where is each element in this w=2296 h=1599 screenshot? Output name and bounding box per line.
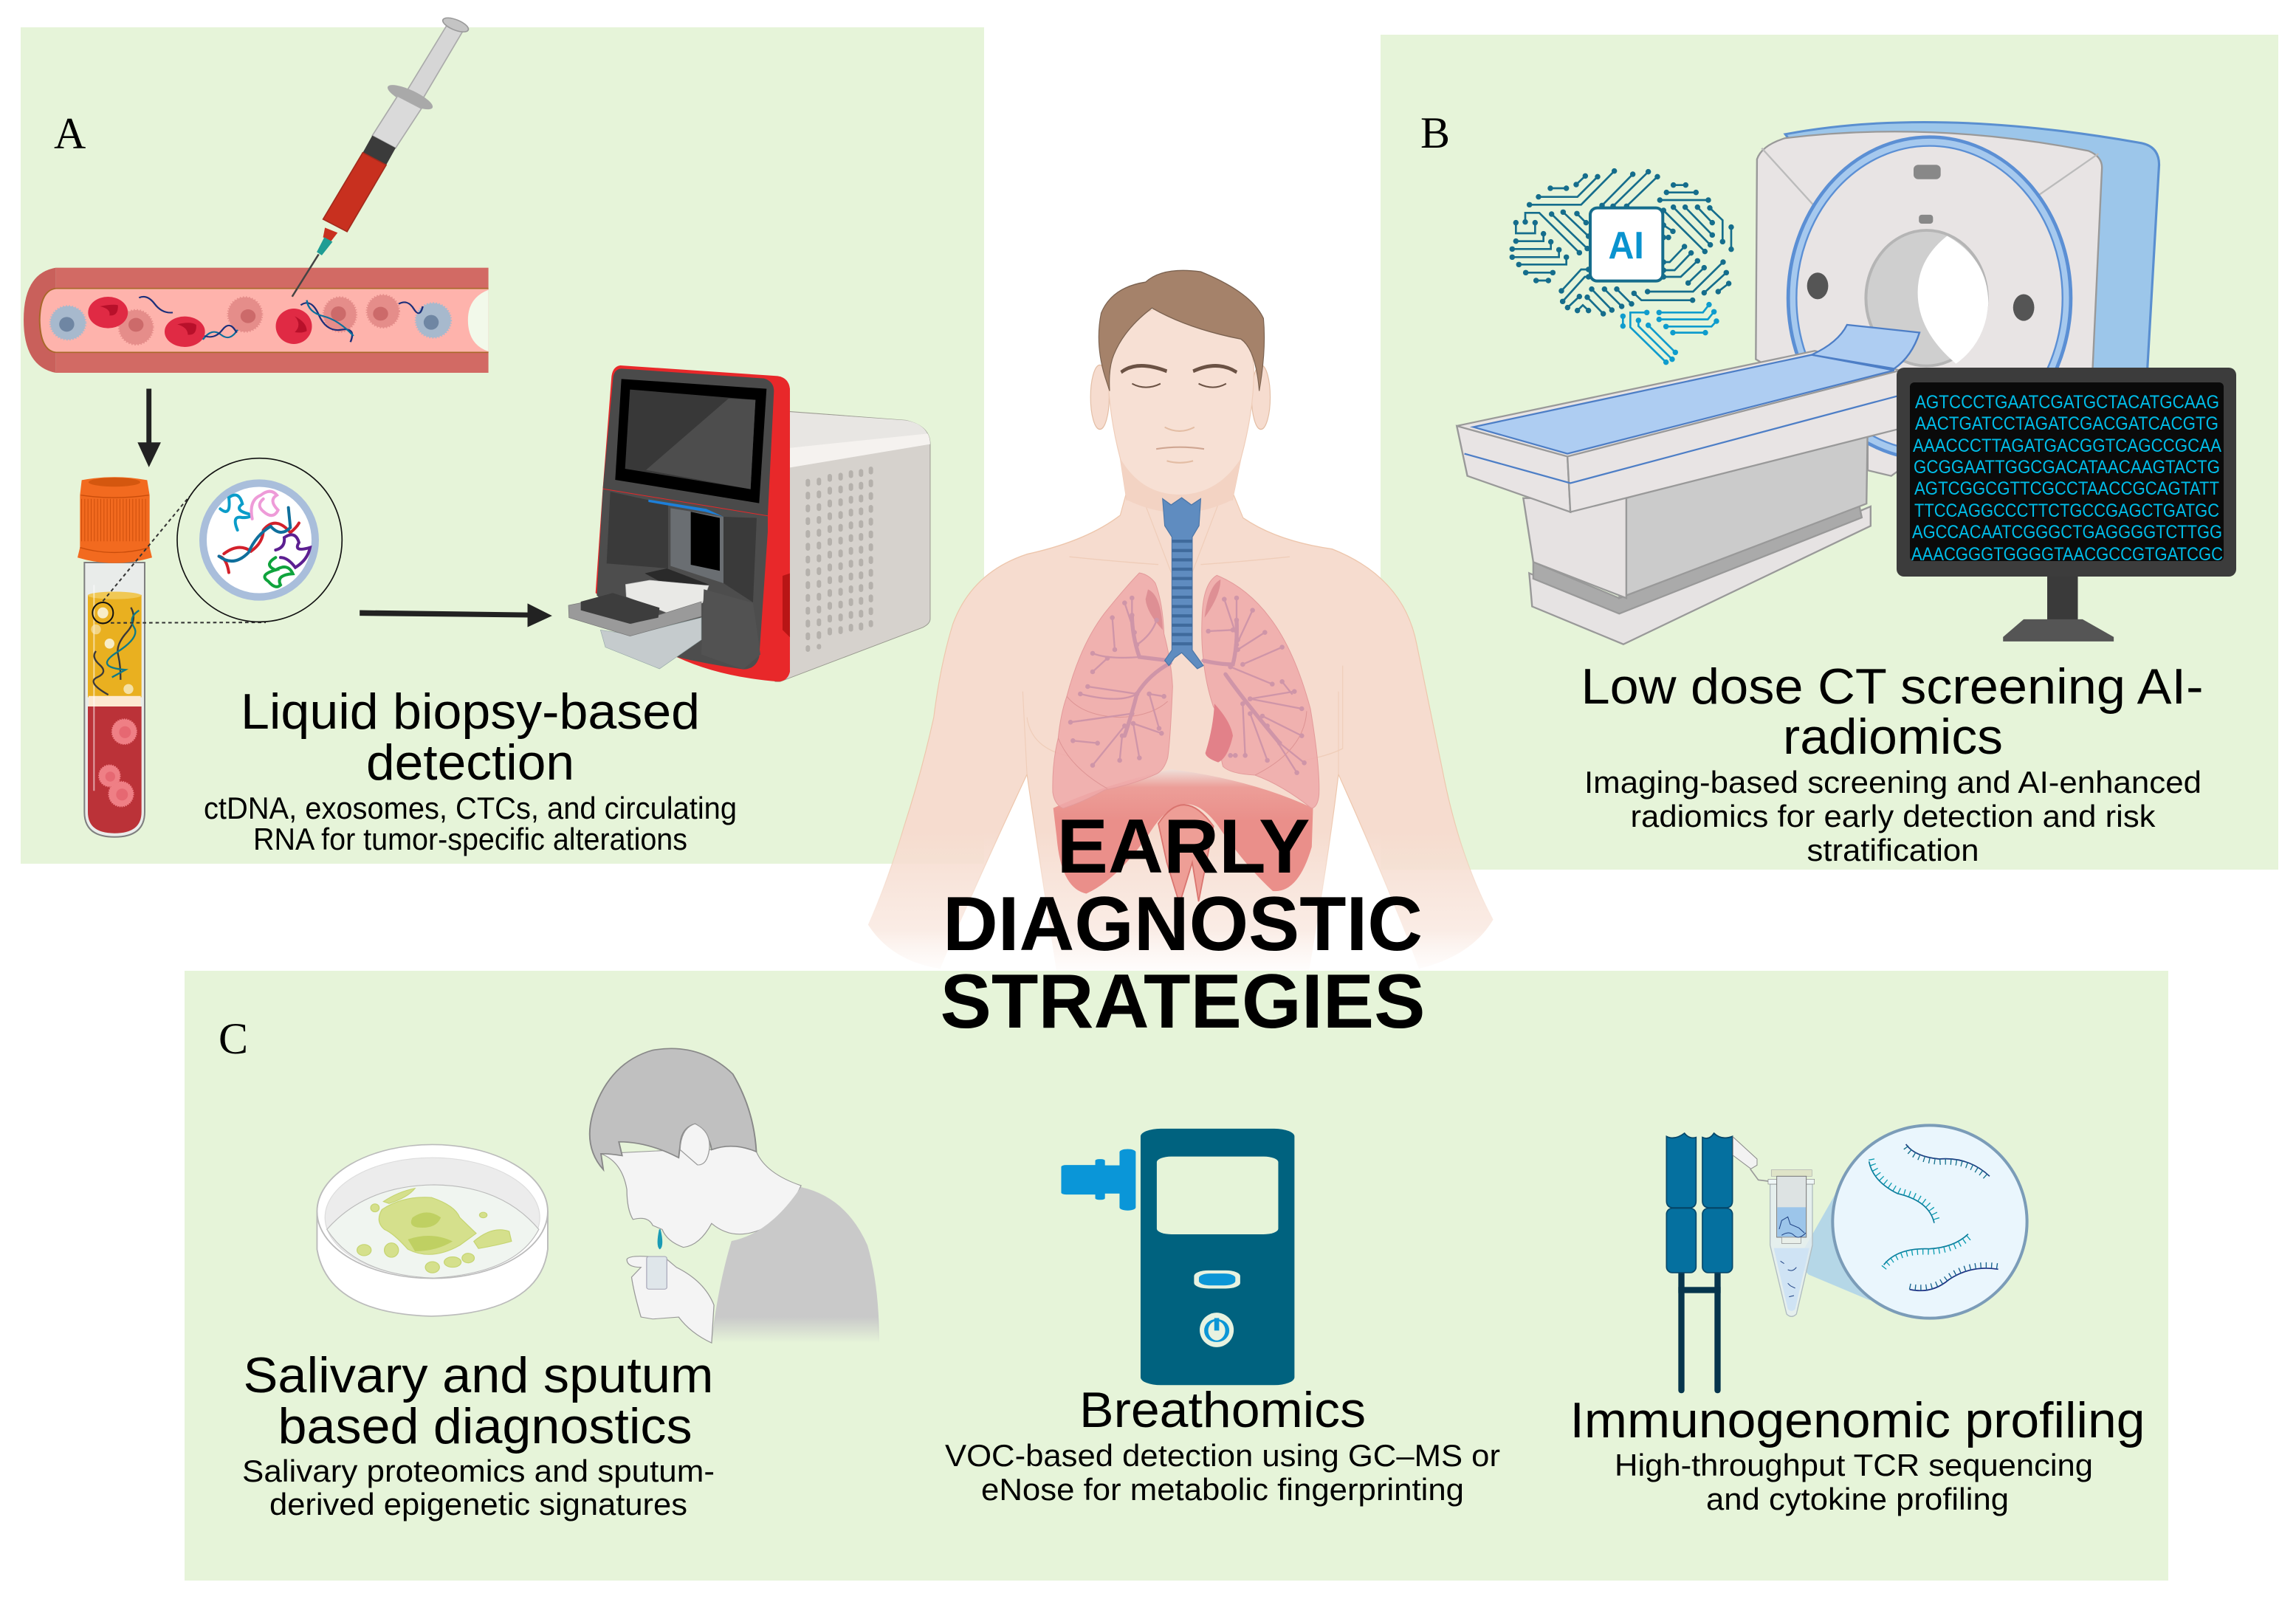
monitor stand: [2003, 573, 2114, 642]
DNA sequence lines: AGTCCCTGAATCGATGCTACATGCAAG: [1915, 392, 2219, 413]
blue status bar: [648, 500, 723, 517]
housing highlight: [790, 433, 930, 467]
sample plate: [625, 580, 709, 613]
DNA sequence lines: AAACGGGTGGGGTAACGCCGTGATCGC: [1911, 544, 2223, 565]
panel A description: RNA for tumor-specific alterations: [253, 822, 687, 856]
panel A heading: detection: [366, 735, 574, 791]
panel C background: [185, 971, 2168, 1581]
panel A: liquid biopsy: [24, 15, 930, 856]
trachea: [1163, 498, 1203, 669]
central human figure with lungs: [868, 270, 1493, 972]
liquid biopsy illustrations: [137, 15, 552, 627]
arrow: tube to analyzer: [360, 603, 552, 627]
AI brain circuit: [1512, 171, 1731, 362]
door right recess: [723, 517, 757, 602]
panel B description: radiomics for early detection and risk: [1630, 799, 2156, 833]
hand holding vial: [627, 1256, 714, 1343]
chest creases: [1022, 495, 1343, 774]
darker lung lobes and heart: [1146, 580, 1233, 763]
cap opening: [89, 478, 140, 486]
window opening: [691, 512, 720, 571]
panel A description: ctDNA, exosomes, CTCs, and circulating: [204, 791, 737, 825]
plasma surface: [88, 592, 141, 599]
tube highlight: [93, 585, 94, 791]
magnified TCR strands: [1832, 1125, 2027, 1318]
plasma DNA: [94, 608, 139, 695]
panel B: low dose CT and AI: [1420, 109, 2236, 867]
main title: EARLY: [1057, 804, 1310, 890]
tube cap: [78, 477, 152, 563]
genomic sequence monitor: [1897, 368, 2236, 577]
panel B heading: radiomics: [1783, 709, 2003, 765]
tumor cell nuclei: [128, 306, 388, 331]
breathomics description: VOC-based detection using GC–MS or: [945, 1438, 1500, 1473]
saliva drop: [659, 1229, 661, 1248]
diaphragm crura: [1158, 805, 1214, 904]
salivary description: Salivary proteomics and sputum-: [242, 1454, 715, 1488]
DNA sequence lines: TTCCAGGCCCTTCTGCCGAGCTGATGC: [1914, 501, 2219, 521]
drawer tray: [568, 602, 701, 636]
immunogenomic heading: Immunogenomic profiling: [1570, 1392, 2145, 1448]
zoom guide lines: [103, 496, 266, 623]
blood collection tube and lens: [78, 458, 342, 837]
strand teeth: [1871, 1147, 1998, 1287]
panel C: non-invasive tests: [219, 1014, 2145, 1521]
plasma layer: [88, 592, 142, 697]
sequencing analyzer: [568, 365, 930, 681]
diaphragm: [1054, 769, 1313, 893]
panel B description: Imaging-based screening and AI-enhanced: [1584, 765, 2202, 799]
bronchial branches: [1070, 598, 1305, 773]
main title: DIAGNOSTIC: [943, 881, 1423, 967]
vent holes: [808, 469, 871, 650]
arrow: vessel to tube: [137, 389, 161, 467]
microcentrifuge tube: [1768, 1170, 1815, 1316]
immunogenomic description: and cytokine profiling: [1706, 1482, 2009, 1516]
CT scanner: [1756, 122, 2159, 476]
mouthpiece: [1061, 1149, 1135, 1211]
syringe: [292, 15, 470, 297]
label A: A: [54, 109, 86, 158]
side latch: [783, 574, 790, 637]
sediment tumor cells: [99, 719, 137, 807]
red cell layer: [88, 706, 142, 833]
lungs: [1053, 573, 1319, 808]
housing top: [790, 412, 928, 448]
DNA sequence lines: AAACCCTTAGATGACGGTCAGCCGCAA: [1913, 436, 2221, 456]
circulating DNA fragments: [139, 297, 423, 342]
pipette tip: [1733, 1137, 1768, 1181]
cap ribs: [81, 458, 148, 583]
immunogenomic description: High-throughput TCR sequencing: [1615, 1448, 2093, 1482]
salivary description: derived epigenetic signatures: [269, 1487, 687, 1521]
face and neck: [1108, 306, 1254, 500]
DNA sequence lines: AGTCGGCGTTCGCCTAACCGCAGTATT: [1914, 478, 2219, 499]
DNA sequence lines: GCGGAATTGGCGACATAACAAGTACTG: [1914, 457, 2220, 478]
black well plate: [581, 593, 659, 624]
ears: [1090, 365, 1271, 429]
facial features: [1121, 365, 1237, 463]
panel A background: [21, 27, 984, 864]
magnified sample lens: [177, 458, 342, 622]
sediment cell nuclei: [106, 726, 131, 800]
DNA sequence lines: AACTGATCCTAGATCGACGATCACGTG: [1915, 413, 2218, 434]
figure body and head: [868, 270, 1493, 972]
lobe lines: [1058, 696, 1307, 788]
left lung: [1053, 573, 1172, 808]
person spitting: [590, 1048, 879, 1343]
petri dish: [317, 1144, 548, 1316]
red frame: [596, 365, 790, 681]
touchscreen bezel: [603, 368, 774, 515]
patient table: [1457, 325, 1919, 644]
white blood cells: [50, 303, 451, 340]
CT and monitor illustrations: [1457, 122, 2159, 644]
trachea rings: [1172, 541, 1192, 644]
salivary heading: based diagnostics: [278, 1398, 692, 1454]
main title: STRATEGIES: [941, 959, 1425, 1045]
DNA sequence lines: AGCCACAATCGGGCTGAGGGGTCTTGG: [1912, 522, 2222, 543]
bronchial trunks: [1124, 615, 1279, 743]
drawer trough: [600, 618, 701, 669]
stems: [1678, 1270, 1721, 1393]
plasma vesicles: [91, 608, 134, 694]
label C: C: [219, 1014, 248, 1063]
immune profiling illustration: [1666, 1125, 2027, 1393]
analyzer housing: [775, 411, 930, 681]
breathomics description: eNose for metabolic fingerprinting: [981, 1472, 1464, 1507]
salivary and sputum illustrations: [317, 1048, 879, 1343]
right lung: [1202, 575, 1319, 808]
AI chip: AI: [1608, 224, 1644, 267]
label B: B: [1420, 109, 1450, 157]
screen glare: [646, 399, 755, 489]
loading window: [670, 508, 723, 583]
blood vessel: [24, 268, 489, 373]
sputum sample: [357, 1189, 512, 1273]
door left recess: [607, 492, 668, 568]
drawer shelf: [645, 568, 709, 591]
breath analyzer device: [1061, 1129, 1294, 1385]
hair: [1099, 270, 1265, 391]
buffy coat: [89, 696, 141, 706]
salivary heading: Salivary and sputum: [244, 1347, 713, 1403]
door corner block: [701, 589, 760, 670]
magnifier cone: [1796, 1191, 1870, 1301]
panel B description: stratification: [1807, 833, 1979, 867]
breathomics heading: Breathomics: [1079, 1382, 1366, 1438]
torso and arms: [868, 492, 1493, 972]
tumor cells: [119, 295, 399, 345]
lower door: [597, 489, 768, 670]
AI chip: [1590, 208, 1663, 281]
immune cell columns: [1666, 1133, 1733, 1273]
tube glass: [84, 563, 145, 837]
panel A heading: Liquid biopsy-based: [241, 684, 700, 740]
panel B background: [1381, 35, 2278, 870]
cap bands: [80, 495, 150, 552]
jaw shadow: [1120, 458, 1241, 513]
red cell dimples: [100, 305, 307, 334]
white cell nuclei: [59, 315, 439, 331]
sampled region ring: [92, 602, 113, 623]
sample vial: [647, 1256, 667, 1289]
red blood cells: [88, 297, 312, 347]
screen frame: [615, 379, 766, 503]
sputum core: [408, 1212, 453, 1251]
screen: [625, 390, 755, 489]
panel B heading: Low dose CT screening AI-: [1581, 658, 2203, 715]
